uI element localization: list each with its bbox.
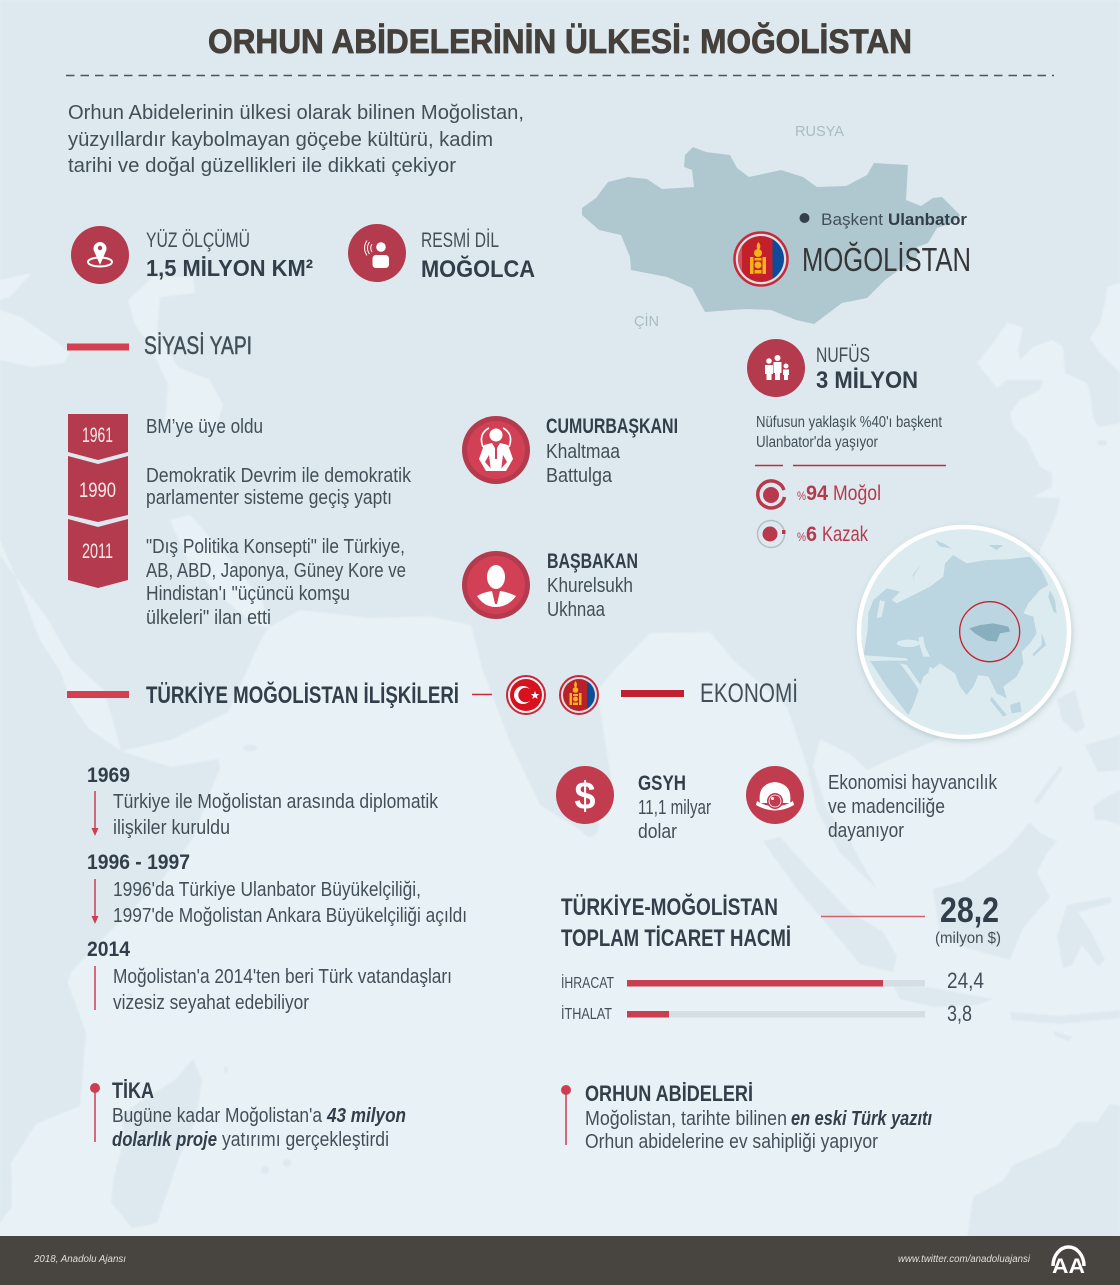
economy note [746, 766, 998, 842]
callout: Orkhon monuments: ORHUN ABİDELERİ [585, 1081, 753, 1106]
callout: Orkhon monuments [561, 1081, 932, 1153]
label: Russia: RUSYA [795, 124, 844, 140]
label: YÜZ ÖLÇÜMÜ [146, 229, 250, 252]
callout: TİKA: 43 milyon [326, 1105, 406, 1127]
heading: CUMURBAŞKANI [546, 415, 678, 438]
total value: 28,2 [940, 891, 999, 930]
text [828, 772, 998, 842]
value: 11,1 milyar [638, 797, 711, 819]
icon: AA logo [1052, 1247, 1085, 1278]
heading: BAŞBAKAN [547, 550, 638, 573]
chevron 1990: 1990 [79, 479, 116, 502]
text: Ekonomisi hayvancılık [828, 772, 998, 794]
chevron 1961: 1961 [82, 424, 113, 447]
entry 2014: 2014 [87, 938, 130, 961]
callout: Orkhon monuments: Orhun abidelerine ev sahipliği yapıyor [585, 1131, 878, 1153]
name: Ukhnaa [547, 599, 606, 621]
callout: Orkhon monuments: Moğolistan, tarihte bilinen [585, 1108, 787, 1130]
entry 1969: 1969 [87, 764, 130, 787]
value: Kazakh: Kazak [822, 523, 868, 546]
intro text: tarihi ve doğal güzellikleri ile dikkati çekiyor [68, 155, 456, 177]
callout: TİKA: TİKA [112, 1078, 154, 1103]
name: Battulga [546, 465, 613, 487]
callout: TİKA: Bugüne kadar Moğolistan'a [112, 1105, 323, 1127]
capital label: Başkent [821, 210, 883, 229]
president [462, 415, 678, 487]
timeline text: BM’ye üye oldu [146, 416, 263, 438]
entry 2014: vizesiz seyahat edebiliyor [113, 992, 309, 1014]
chevron 2011: 2011 [82, 540, 113, 563]
icon: family [747, 339, 805, 397]
timeline text: Demokratik Devrim ile demokratik [146, 465, 412, 487]
relations timeline [87, 764, 467, 1014]
heading: GSYH [638, 772, 686, 795]
capital label [821, 210, 967, 229]
icon: miner helmet [746, 766, 804, 824]
value: dolar [638, 821, 677, 843]
entry 1969: ilişkiler kuruldu [113, 817, 230, 839]
callout: Orkhon monuments: en eski Türk yazıtı [791, 1108, 932, 1130]
label: RESMİ DİL [421, 229, 499, 252]
value: Mongol: % [797, 489, 806, 503]
icon: Turkish flag [507, 676, 545, 714]
credit: 2018, Anadolu Ajansı [33, 1254, 126, 1265]
value [638, 797, 711, 843]
timeline text: AB, ABD, Japonya, Güney Kore ve [146, 560, 406, 582]
capital dot [800, 213, 810, 223]
entry 2014 [87, 938, 452, 1014]
name: Khaltmaa [546, 441, 621, 463]
bar: export [561, 968, 984, 993]
icon: Mongolian flag [734, 232, 788, 286]
text: ve madenciliğe [828, 796, 945, 818]
bar: export: 24,4 [947, 968, 984, 993]
timeline text [146, 416, 412, 629]
entry 1996-1997 [87, 851, 467, 927]
bar: import: 3,8 [947, 1001, 972, 1026]
population [747, 339, 946, 466]
value: Kazakh [797, 523, 868, 546]
bar: import: İTHALAT [561, 1005, 612, 1023]
callout: TİKA: yatırımı gerçekleştirdi [222, 1129, 389, 1151]
stat: language [348, 224, 535, 283]
trade volume [561, 891, 1001, 1026]
timeline text: ülkeleri" ilan etti [146, 607, 271, 629]
intro text: yüzyıllardır kaybolmayan göçebe kültürü, kadim [68, 129, 493, 151]
intro text [68, 102, 524, 177]
name: Khurelsukh [547, 575, 633, 597]
icon: prime minister [462, 551, 530, 619]
entry 1996-1997: 1996 - 1997 [87, 851, 190, 874]
callout: TİKA [90, 1078, 406, 1151]
value: Kazakh: % [797, 530, 806, 544]
entry 1969 [87, 764, 439, 839]
icon: 94 percent ring [758, 481, 784, 508]
heading: economy [621, 677, 798, 708]
heading: Turkey–Mongolia relations: TÜRKİYE MOĞOLİSTAN İLİŞKİLERİ [146, 681, 459, 709]
value: Kazakh: 6 [806, 523, 817, 546]
entry 2014: Moğolistan'a 2014'ten beri Türk vatandaşları [113, 966, 452, 988]
social link: www.twitter.com/anadoluajansi [898, 1254, 1031, 1265]
label: China: ÇİN [634, 312, 659, 330]
stat: area [71, 226, 313, 284]
chevron 2011 [68, 519, 128, 588]
icon: dollar [556, 766, 614, 824]
text: dayanıyor [828, 820, 904, 842]
value: Mongol: 94 [806, 482, 828, 505]
heading: political structure [67, 331, 252, 360]
title divider [66, 74, 1054, 76]
entry 1969: Türkiye ile Moğolistan arasında diplomatik [113, 791, 439, 813]
heading [561, 893, 791, 952]
note [756, 414, 943, 451]
icon: 6 percent ring [758, 520, 786, 548]
icon: speaking person [348, 224, 406, 282]
heading: TÜRKİYE-MOĞOLİSTAN [561, 893, 778, 921]
icon: dollar: $ [574, 775, 596, 818]
heading: economy: EKONOMİ [700, 677, 798, 708]
value: Mongol [797, 482, 881, 505]
callout: TİKA: dolarlık proje [112, 1129, 217, 1151]
entry 1996-1997: 1996'da Türkiye Ulanbator Büyükelçiliği, [113, 879, 421, 901]
icon: president [462, 416, 530, 484]
map: Mongolia [582, 124, 971, 330]
GDP [556, 766, 711, 843]
timeline text: "Dış Politika Konsepti" ile Türkiye, [146, 536, 405, 558]
title: ORHUN ABİDELERİNİN ÜLKESİ: MOĞOLİSTAN [208, 23, 912, 61]
chevron 1990 [68, 456, 128, 522]
icon: AA logo: AA [1052, 1255, 1085, 1278]
icon: Mongolian flag small [560, 676, 598, 714]
value: Mongol: Moğol [833, 482, 881, 505]
heading: TOPLAM TİCARET HACMİ [561, 925, 791, 952]
timeline chevrons [68, 414, 128, 588]
name [546, 441, 621, 487]
value: 3 MİLYON [816, 367, 918, 394]
intro text: Orhun Abidelerinin ülkesi olarak bilinen Moğolistan, [68, 102, 524, 124]
timeline text: parlamenter sisteme geçiş yaptı [146, 487, 392, 509]
heading: Turkey–Mongolia relations [67, 681, 492, 709]
note: Nüfusun yaklaşık %40'ı başkent [756, 414, 943, 431]
unit: (milyon $) [935, 930, 1001, 947]
footer [0, 1236, 1120, 1285]
prime minister [462, 550, 638, 621]
chevron 1961 [68, 414, 128, 460]
label: NUFÜS [816, 344, 870, 367]
note: Ulanbator'da yaşıyor [756, 434, 878, 451]
ethnic shares [758, 481, 881, 548]
capital label: Ulanbator [888, 210, 967, 229]
timeline text: Hindistan'ı "üçüncü komşu [146, 583, 350, 605]
name [547, 575, 633, 621]
bar: import [561, 1001, 972, 1026]
country shape [582, 147, 960, 324]
value: 1,5 MİLYON KM² [146, 255, 313, 281]
heading: political structure: SİYASİ YAPI [144, 331, 252, 360]
locator globe [859, 527, 1069, 737]
country name: MOĞOLİSTAN [802, 241, 971, 278]
entry 1996-1997: 1997'de Moğolistan Ankara Büyükelçiliği açıldı [113, 905, 467, 927]
value: MOĞOLCA [421, 255, 535, 283]
bar: export: İHRACAT [561, 974, 614, 992]
icon: map pin [71, 226, 129, 284]
